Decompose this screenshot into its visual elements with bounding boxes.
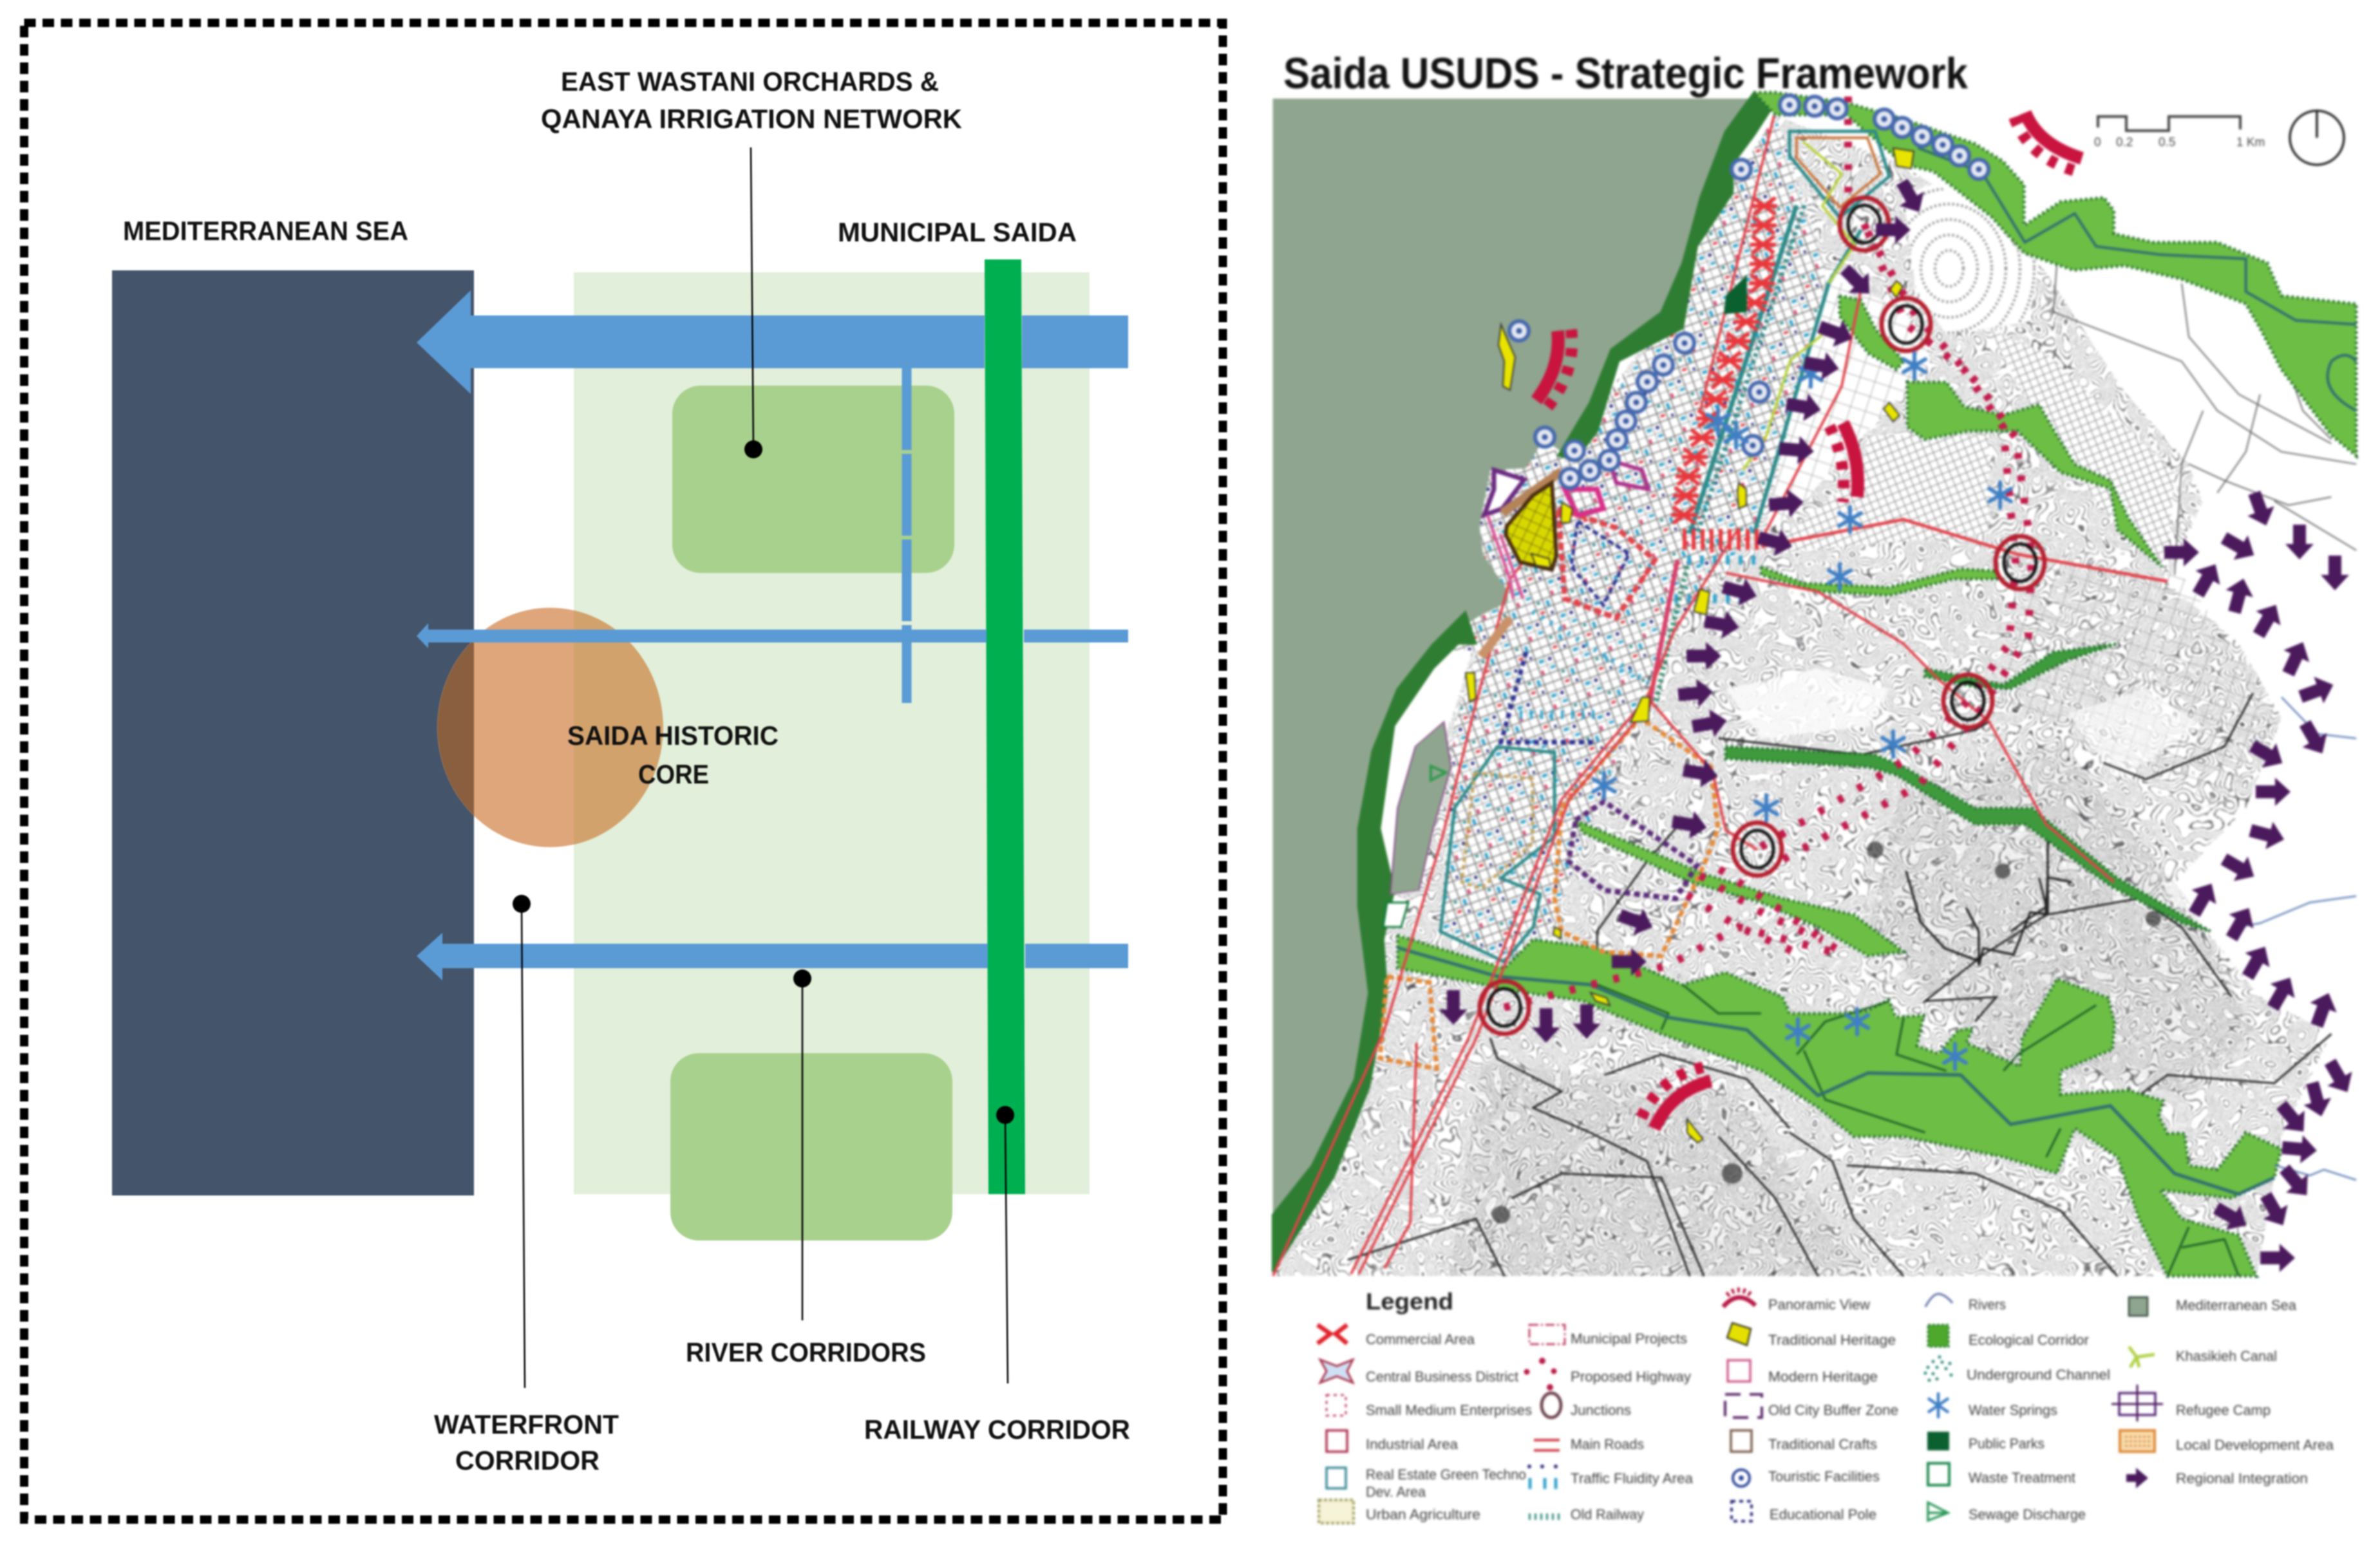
dark hillside roads and dense nodes xyxy=(1492,818,2161,1224)
map title: Saida USUDS - Strategic Framework xyxy=(1283,49,1968,98)
leader: orchards xyxy=(744,147,762,458)
label: Waterfront Corridor xyxy=(434,1409,619,1475)
legend: Urban Agriculture: Urban Agriculture xyxy=(1366,1506,1480,1522)
label: Railway Corridor: RAILWAY CORRIDOR xyxy=(864,1414,1130,1445)
legend: Modern Heritage xyxy=(1728,1360,1878,1385)
legend: Mediterranean Sea xyxy=(2129,1297,2297,1316)
dashed underground river branch xyxy=(902,368,912,703)
ecological corridors, south xyxy=(1397,644,2281,1277)
legend: Small Medium Enterprises: Small Medium Enterprises xyxy=(1366,1402,1532,1418)
legend: Khasikieh Canal xyxy=(2129,1347,2277,1367)
dashed frame xyxy=(24,23,1223,1519)
legend: Ecological Corridor xyxy=(1928,1325,2089,1348)
legend: Commercial Area xyxy=(1318,1325,1475,1347)
left panel: schematic diagram xyxy=(24,23,1223,1519)
legend: Educational Pole: Educational Pole xyxy=(1770,1506,1876,1522)
river arrow: middle xyxy=(417,623,1128,648)
legend: Regional Integration: Regional Integration xyxy=(2176,1470,2308,1486)
north indicator xyxy=(2290,111,2344,165)
scale bar: 0 xyxy=(2094,136,2101,149)
leader: waterfront xyxy=(513,895,531,1388)
rivers xyxy=(1397,148,2356,1194)
commercial area chain xyxy=(1671,198,1777,539)
label: Municipal Saida: MUNICIPAL SAIDA xyxy=(838,217,1077,247)
legend: Junctions xyxy=(1542,1393,1631,1418)
traditional heritage: old city and sites xyxy=(1466,148,1914,1143)
orchards block: north xyxy=(672,386,954,573)
label: Saida Historic Core: CORE xyxy=(638,759,709,789)
legend: Traditional Crafts: Traditional Crafts xyxy=(1768,1436,1877,1452)
Mediterranean Sea block xyxy=(112,270,474,1195)
legend: Municipal Projects xyxy=(1529,1325,1687,1347)
panoramic views xyxy=(1536,113,2082,1128)
legend: Proposed Highway: Proposed Highway xyxy=(1571,1369,1691,1385)
Saida historic core circle xyxy=(437,608,663,847)
leader: railway xyxy=(996,1106,1014,1383)
legend: Mediterranean Sea: Mediterranean Sea xyxy=(2176,1297,2297,1313)
legend: Underground Channel xyxy=(1924,1356,2110,1383)
legend: Regional Integration xyxy=(2126,1468,2308,1488)
waste treatment white block xyxy=(1383,903,1408,927)
regional integration arrows xyxy=(1439,175,2360,1272)
legend: Old City Buffer Zone xyxy=(1725,1394,1898,1418)
legend: Junctions: Junctions xyxy=(1571,1402,1631,1418)
municipal Saida area xyxy=(574,272,1090,1194)
sewage discharge xyxy=(1431,766,1446,780)
public park xyxy=(1724,275,1747,314)
Mediterranean Sea on the map xyxy=(1273,98,1754,1215)
railway corridor bar xyxy=(985,259,1025,1194)
sparse roads, north east xyxy=(2054,263,2356,575)
legend: Modern Heritage: Modern Heritage xyxy=(1768,1369,1878,1385)
label: orchards: EAST WASTANI ORCHARDS & xyxy=(561,66,939,97)
label: River Corridors: RIVER CORRIDORS xyxy=(686,1337,926,1367)
legend: Real Estate Green Techno Dev. Area: Dev. Area xyxy=(1366,1484,1426,1500)
legend: Educational Pole xyxy=(1732,1501,1876,1522)
leader: river xyxy=(793,969,811,1320)
legend: Touristic Facilities xyxy=(1733,1468,1880,1486)
legend: Refugee Camp xyxy=(2111,1385,2271,1421)
legend: Real Estate Green Techno Dev. Area: Real Estate Green Techno xyxy=(1366,1466,1526,1483)
legend: Rivers xyxy=(1925,1294,2006,1313)
legend: Traditional Heritage xyxy=(1727,1323,1896,1348)
legend: Proposed Highway xyxy=(1524,1358,1691,1390)
ecological corridors, north xyxy=(1754,93,2356,595)
label: orchards: QANAYA IRRIGATION NETWORK xyxy=(541,104,962,134)
legend: Panoramic View xyxy=(1723,1290,1870,1313)
legend: Municipal Projects: Municipal Projects xyxy=(1571,1331,1687,1347)
legend heading: Legend xyxy=(1366,1288,1453,1315)
legend: Public Parks: Public Parks xyxy=(1969,1436,2045,1452)
legend: Ecological Corridor: Ecological Corridor xyxy=(1969,1332,2089,1348)
dark channels in corridors xyxy=(1597,985,2239,1277)
legend xyxy=(1318,1288,2334,1523)
legend: Waste Treatment: Waste Treatment xyxy=(1969,1470,2075,1486)
legend: Local Development Area xyxy=(2120,1430,2334,1453)
legend: Main Roads xyxy=(1534,1436,1644,1452)
scale bar: 0.5 xyxy=(2158,136,2175,149)
legend: Main Roads: Main Roads xyxy=(1571,1436,1644,1452)
label: Saida Historic Core: SAIDA HISTORIC xyxy=(567,720,779,751)
river arrow: north xyxy=(417,290,1128,394)
teal and orange framework outlines xyxy=(1380,131,1889,1069)
label: Waterfront Corridor: WATERFRONT xyxy=(434,1409,619,1439)
legend: Small Medium Enterprises xyxy=(1327,1395,1532,1418)
headland fringe xyxy=(1481,470,1603,657)
legend: Old Railway: Old Railway xyxy=(1571,1506,1644,1522)
legend: Industrial Area xyxy=(1327,1430,1459,1452)
street and contour base xyxy=(1273,98,2361,1276)
label: Saida Historic Core xyxy=(567,720,779,789)
legend: Refugee Camp: Refugee Camp xyxy=(2176,1402,2271,1418)
legend: Industrial Area: Industrial Area xyxy=(1366,1436,1459,1452)
legend: Khasikieh Canal: Khasikieh Canal xyxy=(2176,1348,2277,1364)
legend: Real Estate Green Techno Dev. Area xyxy=(1327,1466,1526,1500)
legend: Central Business District: Central Business District xyxy=(1366,1369,1518,1385)
legend: Traffic Fluidity Area xyxy=(1527,1465,1694,1489)
legend: Central Business District xyxy=(1320,1360,1518,1385)
black local roads, south xyxy=(1348,693,2331,1277)
legend: Sewage Discharge xyxy=(1928,1503,2086,1522)
dark green waterfront strip xyxy=(1273,93,1775,1272)
legend: Commercial Area: Commercial Area xyxy=(1366,1331,1475,1347)
inner harbour basin xyxy=(1390,722,1451,894)
label: Waterfront Corridor: CORRIDOR xyxy=(455,1445,600,1475)
legend: Traditional Crafts xyxy=(1731,1430,1877,1452)
legend: Rivers: Rivers xyxy=(1969,1297,2006,1313)
legend: Old City Buffer Zone: Old City Buffer Zone xyxy=(1768,1402,1898,1418)
scale bar xyxy=(2094,117,2265,149)
legend: Urban Agriculture xyxy=(1319,1500,1480,1523)
legend: Water Springs xyxy=(1928,1392,2057,1418)
label: orchards xyxy=(541,66,962,134)
proposed highway dots xyxy=(1504,97,2032,1007)
legend: Panoramic View: Panoramic View xyxy=(1768,1297,1870,1313)
orchards block: south xyxy=(670,1053,952,1241)
legend: Traditional Heritage: Traditional Heritage xyxy=(1768,1332,1896,1348)
scale bar: 1 Km xyxy=(2236,136,2265,149)
legend: Waste Treatment xyxy=(1928,1463,2075,1486)
scale bar: 0.2 xyxy=(2116,136,2133,149)
legend: Traffic Fluidity Area: Traffic Fluidity Area xyxy=(1571,1470,1694,1486)
legend: Water Springs: Water Springs xyxy=(1969,1402,2057,1418)
legend: Public Parks xyxy=(1927,1432,2045,1452)
main roads xyxy=(1273,116,2168,1276)
legend: Sewage Discharge: Sewage Discharge xyxy=(1969,1506,2086,1522)
legend: Underground Channel: Underground Channel xyxy=(1967,1367,2110,1383)
river arrow: south xyxy=(417,933,1128,980)
junctions xyxy=(1480,198,2045,1034)
touristic facilities rings xyxy=(1509,95,1988,488)
label: Mediterranean Sea: MEDITERRANEAN SEA xyxy=(123,216,408,246)
right panel: strategic framework map xyxy=(1273,49,2361,1523)
legend: Touristic Facilities: Touristic Facilities xyxy=(1768,1468,1880,1484)
legend: Local Development Area: Local Development Area xyxy=(2176,1437,2334,1453)
water springs xyxy=(1593,353,2011,1069)
